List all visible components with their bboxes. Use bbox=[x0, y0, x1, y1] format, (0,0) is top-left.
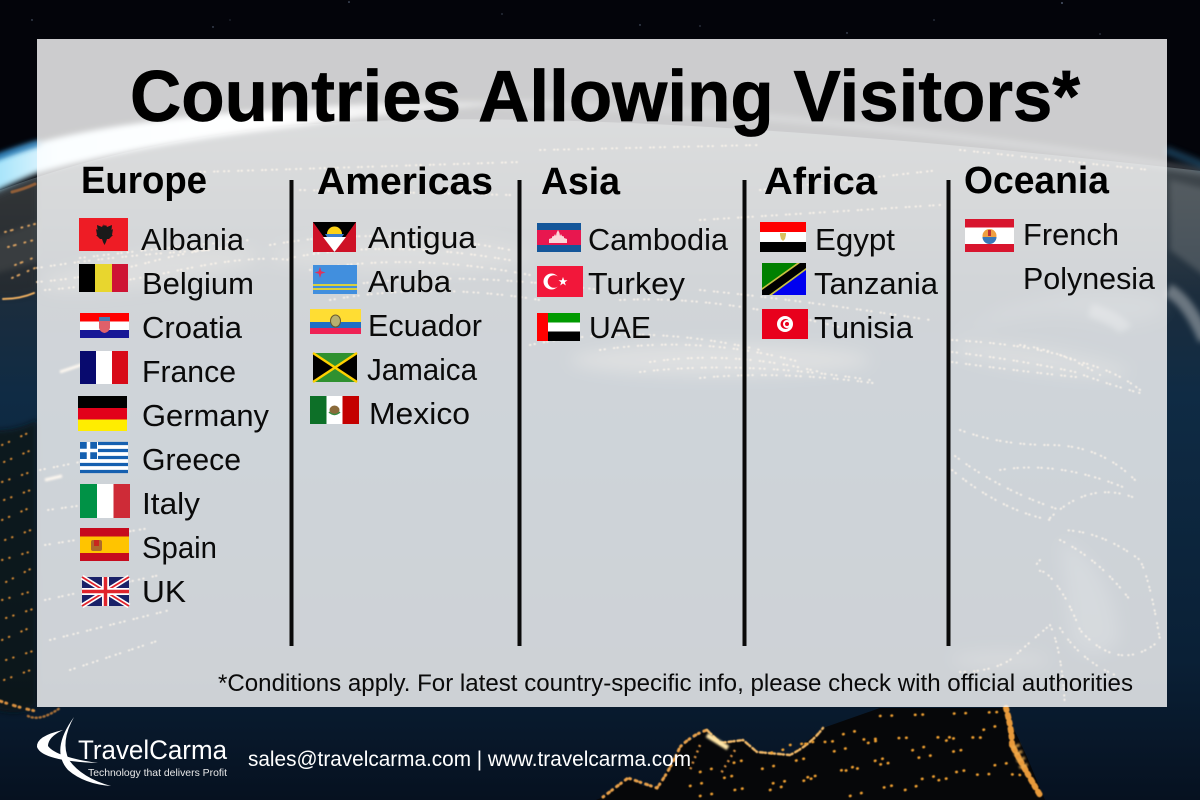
label: Tunisia bbox=[814, 310, 914, 345]
icon: Antigua flag bbox=[313, 222, 356, 252]
row: French Polynesia bbox=[965, 217, 1156, 296]
column divider: Asia / Africa bbox=[742, 180, 746, 646]
label: Croatia bbox=[142, 310, 243, 345]
column divider: Europe / Americas bbox=[290, 180, 294, 646]
logo wordmark: TravelCarma bbox=[78, 735, 228, 765]
logo: TravelCarma bbox=[37, 717, 228, 786]
label: France bbox=[142, 354, 236, 389]
icon: Cambodia flag bbox=[537, 223, 581, 252]
label: Germany bbox=[142, 398, 269, 433]
label: Jamaica bbox=[367, 352, 478, 387]
row: UAE bbox=[537, 310, 651, 345]
label: Greece bbox=[142, 442, 241, 477]
icon: Italy flag bbox=[80, 484, 130, 518]
label: Italy bbox=[142, 486, 201, 521]
label: Aruba bbox=[368, 264, 452, 299]
label: Tanzania bbox=[814, 266, 939, 301]
label: UAE bbox=[589, 310, 651, 345]
icon: Ecuador flag bbox=[310, 309, 361, 334]
row: Belgium bbox=[79, 264, 254, 301]
row: Italy bbox=[80, 484, 201, 521]
icon: Turkey flag bbox=[537, 266, 583, 297]
heading: Africa: Africa bbox=[764, 161, 878, 203]
heading: Americas: Americas bbox=[317, 161, 493, 203]
atmosphere arc bbox=[0, 102, 560, 194]
heading: Oceania: Oceania bbox=[964, 160, 1110, 202]
icon: Tunisia flag bbox=[762, 309, 808, 339]
icon: Mexico flag bbox=[310, 396, 359, 424]
row: Antigua bbox=[313, 220, 477, 255]
icon: Tanzania flag bbox=[762, 263, 806, 295]
row: Albania bbox=[79, 218, 245, 257]
footnote: *Conditions apply. For latest country-specific info, please check with official authorities bbox=[218, 670, 1133, 697]
icon: Albania flag bbox=[79, 218, 128, 251]
stars bbox=[31, 1, 1101, 35]
icon: Aruba flag bbox=[313, 265, 357, 294]
row: Spain bbox=[80, 528, 217, 565]
row: Tanzania bbox=[762, 263, 939, 301]
label: Albania bbox=[141, 222, 245, 257]
row: Egypt bbox=[760, 222, 895, 257]
row: Mexico bbox=[310, 396, 470, 431]
icon: Egypt flag bbox=[760, 222, 806, 252]
row: Tunisia bbox=[762, 309, 914, 345]
city lights under the panel bbox=[37, 145, 1160, 708]
land mass: bottom right bbox=[596, 708, 1045, 800]
row: Germany bbox=[78, 396, 269, 433]
panel: translucent white card bbox=[37, 39, 1167, 707]
heading: Europe: Europe bbox=[81, 160, 207, 202]
icon: French Polynesia flag bbox=[965, 219, 1014, 252]
column divider: Americas / Asia bbox=[518, 180, 522, 646]
label: Turkey bbox=[588, 266, 686, 301]
label: Spain bbox=[142, 530, 217, 565]
panel: Asia column bbox=[537, 161, 729, 345]
column divider: Africa / Oceania bbox=[946, 180, 950, 646]
label: UK bbox=[142, 574, 186, 609]
panel: Europe column bbox=[78, 160, 269, 609]
soft glow around the cities bbox=[39, 237, 1131, 668]
label: Antigua bbox=[368, 220, 477, 255]
panel: Africa column bbox=[760, 161, 939, 345]
icon: logo swooshes bbox=[37, 717, 111, 786]
row: Aruba bbox=[313, 264, 452, 299]
icon: France flag bbox=[80, 351, 128, 384]
label: French bbox=[1023, 217, 1119, 252]
icon: UAE flag bbox=[537, 313, 580, 341]
row: UK bbox=[82, 574, 186, 609]
heading: Asia: Asia bbox=[541, 161, 621, 203]
label: Belgium bbox=[142, 266, 254, 301]
land: left side bbox=[0, 420, 37, 712]
logo tagline: Technology that delivers Profit bbox=[88, 767, 227, 779]
label continuation: Polynesia bbox=[1023, 261, 1156, 296]
panel: Oceania column bbox=[964, 160, 1156, 296]
label: Cambodia bbox=[588, 222, 729, 257]
city lights: left strip bbox=[0, 184, 60, 718]
icon: Belgium flag bbox=[79, 264, 128, 292]
row: France bbox=[80, 351, 236, 389]
icon: UK flag bbox=[82, 577, 129, 606]
label: Mexico bbox=[369, 396, 470, 431]
icon: Jamaica flag bbox=[313, 353, 357, 382]
icon: Germany flag bbox=[78, 396, 127, 431]
label: Ecuador bbox=[368, 308, 482, 343]
title: Countries Allowing Visitors* bbox=[130, 57, 1080, 137]
clouds bbox=[0, 222, 37, 275]
icon: Spain flag bbox=[80, 528, 129, 561]
contact details: sales@travelcarma.com | www.travelcarma.com bbox=[248, 748, 691, 771]
row: Cambodia bbox=[537, 222, 729, 257]
row: Turkey bbox=[537, 266, 686, 301]
row: Greece bbox=[80, 442, 241, 477]
icon: Croatia flag bbox=[80, 313, 129, 338]
panel: Americas column bbox=[310, 161, 493, 431]
row: Jamaica bbox=[313, 352, 478, 387]
row: Croatia bbox=[80, 310, 243, 345]
label: Egypt bbox=[815, 222, 895, 257]
row: Ecuador bbox=[310, 308, 482, 343]
icon: Greece flag bbox=[80, 442, 128, 473]
